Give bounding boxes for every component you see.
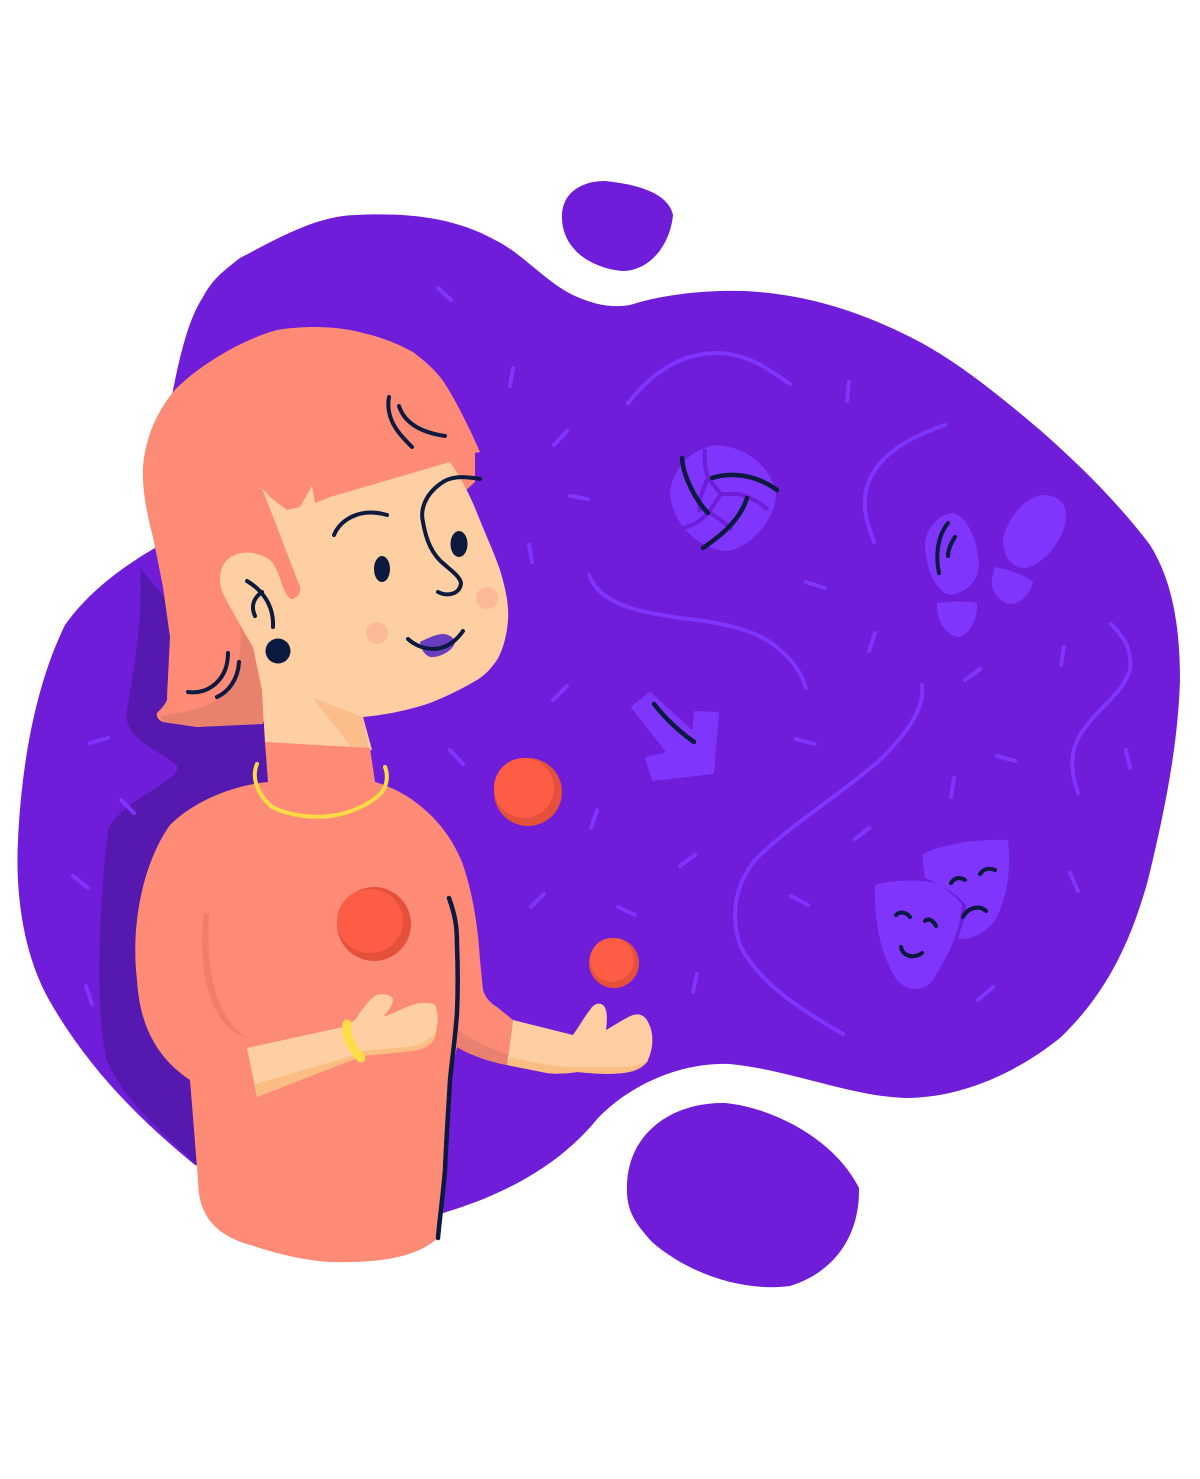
- small blob top: [562, 181, 673, 271]
- right hand: [507, 1004, 652, 1074]
- ball: upper: [494, 758, 562, 826]
- eyes: [374, 556, 390, 582]
- sleeve shade: [457, 1030, 509, 1065]
- right hand shadow: [507, 1057, 648, 1074]
- blob bottom: [627, 1103, 859, 1287]
- arm line: [438, 898, 458, 1238]
- decorative dashes: [73, 288, 1130, 1004]
- left arm and hand: [247, 994, 438, 1097]
- cheeks: [366, 622, 388, 644]
- icon: volleyball: [670, 445, 777, 551]
- necklace: [255, 764, 387, 817]
- decorative curved lines: [589, 353, 1130, 1034]
- body: [135, 742, 513, 1262]
- hair shade: [160, 627, 263, 727]
- icon: arrow: [632, 693, 718, 780]
- character: [135, 327, 652, 1262]
- icon: footprints: [925, 495, 1066, 637]
- ball: on chest: [337, 887, 411, 961]
- breast line: [202, 912, 247, 1038]
- ball: lower: [589, 938, 639, 988]
- background blob: [17, 214, 1180, 1214]
- lips: [420, 634, 455, 657]
- face and neck: [220, 462, 508, 750]
- left arm shadow: [255, 1032, 436, 1097]
- face lines: [188, 397, 480, 697]
- neck shadow: [313, 698, 369, 749]
- hair: [143, 327, 480, 727]
- bracelet: [347, 1024, 361, 1058]
- earring: [266, 638, 290, 664]
- icon: theatre masks: [875, 840, 1009, 989]
- character shadow: [99, 568, 300, 1165]
